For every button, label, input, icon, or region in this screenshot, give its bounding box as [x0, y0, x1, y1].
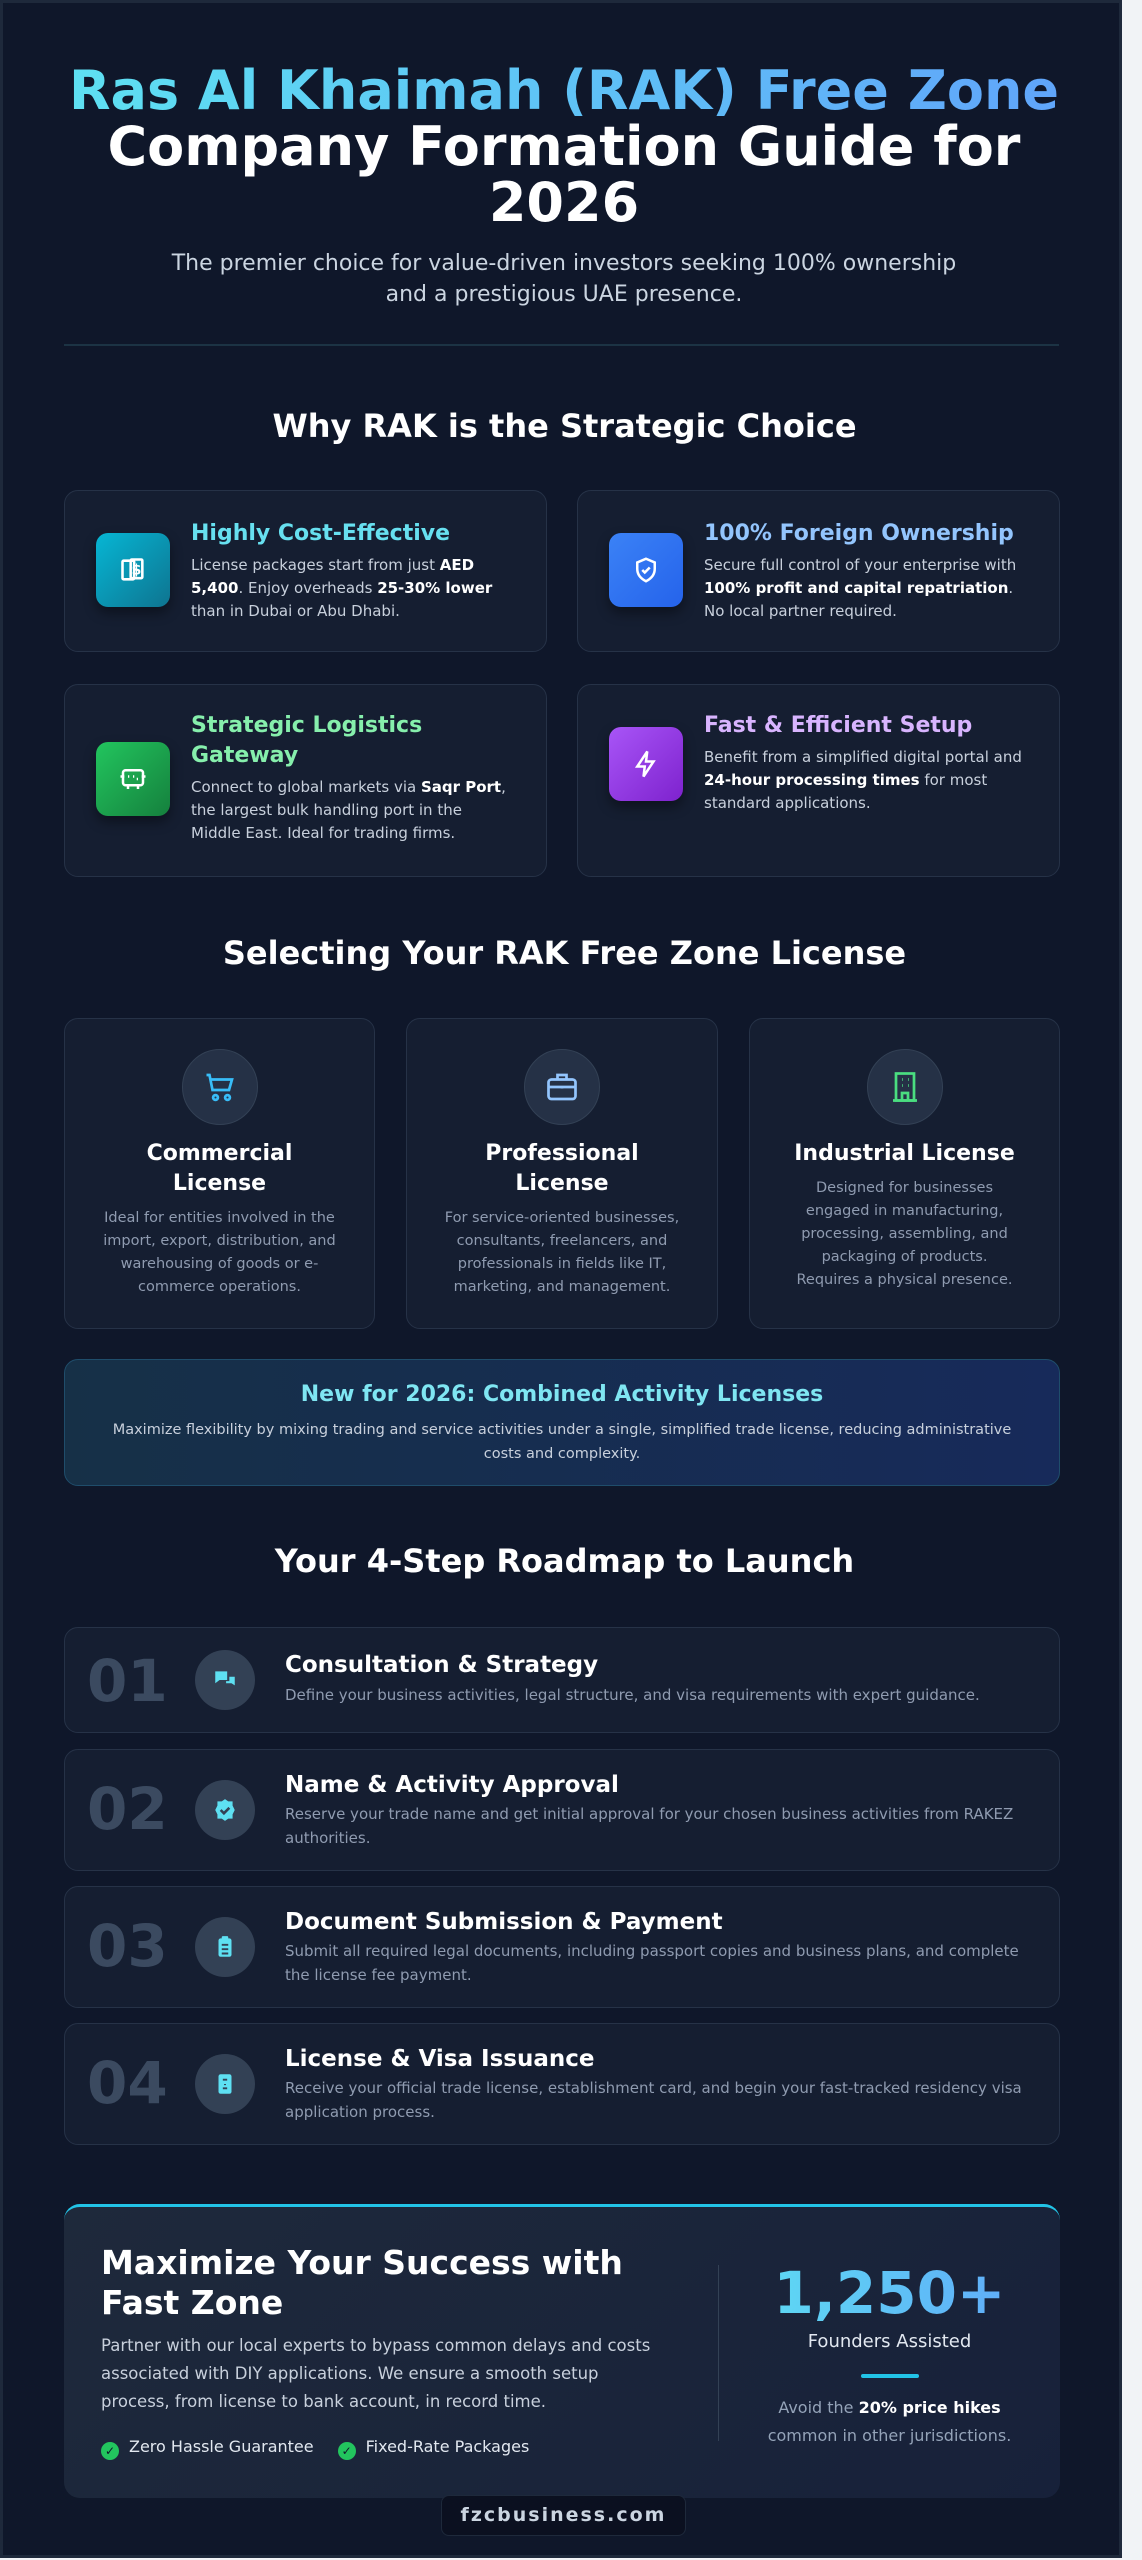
- step 1: Consultation & Strategy: [285, 1652, 598, 1678]
- icon: briefcase: [524, 1049, 600, 1125]
- license: commercial: Ideal for entities involved in the import, export, distribution, and warehousing of goods or e-commerce operations.: [103, 1210, 336, 1295]
- footer: website: [441, 2495, 686, 2536]
- title: 2026: [489, 171, 639, 234]
- card: logistics: Gateway: [191, 743, 298, 768]
- CTA heading: Fast Zone: [101, 2283, 283, 2322]
- step 2: [64, 1749, 1060, 1871]
- license: professional: [406, 1018, 718, 1329]
- icon: money: $: [132, 563, 141, 579]
- CTA heading: [101, 2243, 623, 2322]
- icon: chat: [195, 1650, 255, 1710]
- step 2: Name & Activity Approval: [285, 1772, 619, 1798]
- subtitle: The premier choice for value-driven investors seeking 100% ownership: [172, 251, 956, 276]
- stat: 1,250+: [773, 2259, 1006, 2327]
- step 1: 01: [87, 1647, 168, 1715]
- license: industrial: Industrial License: [794, 1141, 1015, 1166]
- title: Company Formation Guide for: [108, 115, 1020, 178]
- license: commercial: License: [173, 1171, 266, 1196]
- step 3: Document Submission & Payment: [285, 1909, 723, 1935]
- heading: license: Selecting Your RAK Free Zone License: [223, 934, 906, 972]
- card: foreign ownership: Secure full control of your enterprise with 100% profit and capital repatriation. No local partner required.: [704, 556, 1016, 620]
- card: fast setup: Benefit from a simplified digital portal and 24-hour processing times for most standard applications.: [704, 748, 1022, 812]
- footer: website: fzcbusiness.com: [461, 2504, 666, 2526]
- heading: roadmap: Your 4-Step Roadmap to Launch: [275, 1542, 854, 1580]
- banner: combined licenses: [64, 1359, 1060, 1486]
- CTA text: Partner with our local experts to bypass common delays and costs associated with DIY applications. We ensure a smooth setup process, from license to bank account, in record time.: [101, 2336, 650, 2411]
- step 4: [64, 2023, 1060, 2145]
- license: commercial: [64, 1018, 375, 1329]
- icon: ship: [96, 742, 170, 816]
- subtitle: and a prestigious UAE presence.: [386, 282, 742, 307]
- card: logistics: Strategic Logistics: [191, 713, 422, 738]
- card: logistics: [64, 684, 547, 877]
- card: cost effective: [64, 490, 547, 652]
- checklist: ✓: [342, 2444, 352, 2458]
- title: Ras Al Khaimah (RAK) Free Zone: [69, 59, 1059, 122]
- step 2: Reserve your trade name and get initial approval for your chosen business activities from RAKEZ authorities.: [285, 1805, 1013, 1847]
- stat: Founders Assisted: [808, 2331, 971, 2352]
- step 3: Submit all required legal documents, including passport copies and business plans, and complete the license fee payment.: [285, 1942, 1019, 1984]
- icon: card: [195, 2054, 255, 2114]
- card: fast setup: Fast & Efficient Setup: [704, 713, 972, 738]
- step 1: [64, 1627, 1060, 1733]
- step 4: License & Visa Issuance: [285, 2046, 594, 2072]
- step 3: [64, 1886, 1060, 2008]
- title: [69, 59, 1059, 234]
- step 1: Define your business activities, legal structure, and visa requirements with expert guidance.: [285, 1686, 980, 1704]
- subtitle: [172, 251, 956, 307]
- step 2: 02: [87, 1775, 168, 1843]
- heading: why RAK: Why RAK is the Strategic Choice: [272, 407, 857, 445]
- CTA heading: Maximize Your Success with: [101, 2243, 623, 2282]
- license: professional: For service-oriented businesses, consultants, freelancers, and professionals in fields like IT, marketing, and management.: [445, 1210, 679, 1295]
- card: foreign ownership: 100% Foreign Ownership: [704, 521, 1014, 546]
- checklist: [101, 2437, 529, 2460]
- banner: combined licenses: New for 2026: Combined Activity Licenses: [301, 1382, 823, 1407]
- checklist: Fixed-Rate Packages: [366, 2437, 529, 2456]
- license: professional: License: [515, 1171, 609, 1196]
- card: fast setup: [577, 684, 1060, 877]
- icon: money: [96, 533, 170, 607]
- banner: combined licenses: Maximize flexibility by mixing trading and service activities under a single, simplified trade license, reducing administrative costs and complexity.: [113, 1422, 1011, 1462]
- icon: lightning: [609, 727, 683, 801]
- icon: cart: [182, 1049, 258, 1125]
- step 3: 03: [87, 1912, 168, 1980]
- license: industrial: [749, 1018, 1060, 1329]
- step 4: 04: [87, 2049, 168, 2117]
- stat: Avoid the 20% price hikes: [778, 2398, 1001, 2417]
- license: commercial: Commercial: [147, 1141, 292, 1166]
- card: logistics: Connect to global markets via Saqr Port, the largest bulk handling port in the Middle East. Ideal for trading firms.: [191, 778, 506, 842]
- stat: [768, 2259, 1011, 2445]
- icon: building: [866, 1049, 942, 1125]
- checklist: Zero Hassle Guarantee: [129, 2437, 314, 2456]
- icon: badge check: [195, 1780, 255, 1840]
- license: industrial: Designed for businesses engaged in manufacturing, processing, assembling, and packaging of products. Requires a physical presence.: [796, 1180, 1012, 1288]
- icon: clipboard: [195, 1917, 255, 1977]
- step 4: Receive your official trade license, establishment card, and begin your fast-tracked residency visa application process.: [285, 2079, 1022, 2121]
- card: cost effective: Highly Cost-Effective: [191, 521, 450, 546]
- checklist: ✓: [105, 2444, 115, 2458]
- card: foreign ownership: [577, 490, 1060, 652]
- icon: shield: [609, 533, 683, 607]
- card: cost effective: License packages start from just AED 5,400. Enjoy overheads 25-30% lower than in Dubai or Abu Dhabi.: [191, 556, 492, 620]
- CTA panel: [64, 2204, 1060, 2498]
- stat: common in other jurisdictions.: [768, 2426, 1011, 2445]
- license: professional: Professional: [485, 1141, 639, 1166]
